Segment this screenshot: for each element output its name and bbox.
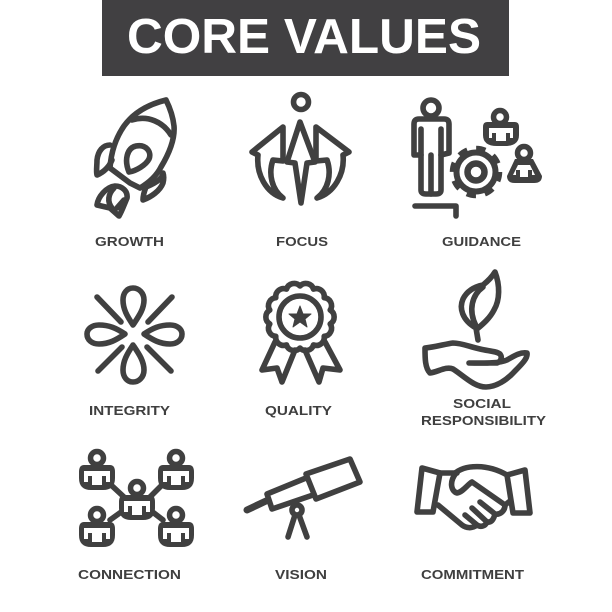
person top right — [158, 452, 194, 490]
panel: guidance — [414, 100, 542, 249]
label: social responsibility: RESPONSIBILITY — [421, 413, 546, 428]
person centre — [119, 482, 155, 520]
title banner — [102, 0, 509, 76]
label: quality: QUALITY — [265, 403, 332, 418]
figure: team member 1 — [483, 110, 519, 146]
connectors — [110, 484, 163, 520]
person bottom left — [79, 508, 115, 547]
title banner: CORE VALUES — [127, 10, 481, 64]
icon: integrity flower — [87, 288, 182, 382]
label: growth: GROWTH — [95, 234, 164, 249]
figure: team member 2 — [507, 146, 542, 183]
label: vision: VISION — [275, 567, 327, 582]
icon: handshake — [417, 467, 530, 528]
panel: connection — [78, 452, 194, 582]
panel: commitment — [417, 467, 530, 582]
label: integrity: INTEGRITY — [89, 403, 170, 418]
panel: focus — [252, 94, 349, 249]
icon: gear — [453, 149, 499, 195]
label: social responsibility: SOCIAL — [453, 396, 511, 411]
label: guidance: GUIDANCE — [442, 234, 521, 249]
person top left — [79, 452, 115, 490]
panel: vision — [247, 459, 360, 582]
icon: award rosette — [262, 283, 340, 382]
icon: focus arrows — [252, 94, 349, 203]
icon: telescope — [247, 459, 360, 537]
label: commitment: COMMITMENT — [421, 567, 524, 582]
figure: leader — [414, 100, 456, 216]
icon: connected people network — [79, 452, 194, 547]
panel: growth — [95, 100, 174, 249]
label: focus: FOCUS — [276, 234, 328, 249]
icon: person on platform with gear and team — [414, 100, 542, 216]
person bottom right — [158, 508, 194, 547]
panel: integrity — [87, 288, 182, 418]
label: social responsibility — [421, 396, 546, 428]
icon: rocket — [97, 100, 174, 216]
label: connection: CONNECTION — [78, 567, 181, 582]
panel: social responsibility — [421, 272, 546, 428]
panel: quality — [262, 283, 340, 418]
icon: leaf in hand — [425, 272, 527, 387]
